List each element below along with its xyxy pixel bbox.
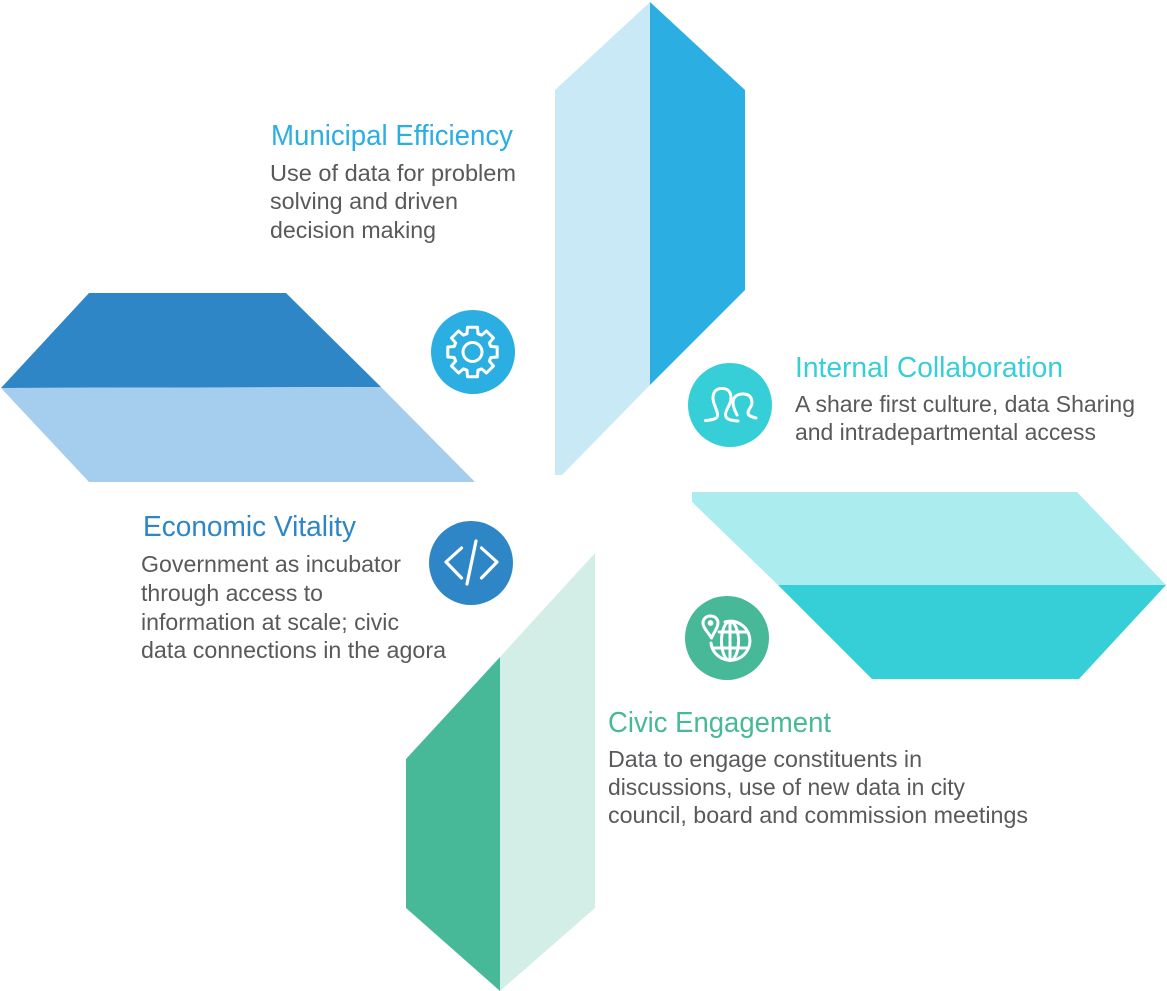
description: Civic Engagement: Data to engage constituents in [608, 746, 922, 772]
description: Internal Collaboration: A share first culture, data Sharing [795, 391, 1135, 417]
text block: Civic Engagement [608, 707, 1028, 828]
icon: globe with location pin [685, 596, 769, 680]
description: Economic Vitality: through access to [141, 580, 323, 606]
description: Economic Vitality: data connections in the agora [141, 637, 447, 663]
description: Economic Vitality: information at scale; civic [141, 609, 399, 635]
description: Internal Collaboration: and intradepartmental access [795, 419, 1096, 445]
description: Municipal Efficiency: Use of data for problem [270, 160, 516, 186]
text block: Internal Collaboration [795, 352, 1135, 445]
description: Internal Collaboration [795, 391, 1135, 445]
icon: gear [431, 310, 515, 394]
description: Economic Vitality [141, 551, 447, 663]
description: Economic Vitality: Government as incubator [141, 551, 401, 577]
text block: Municipal Efficiency [270, 120, 516, 243]
description: Civic Engagement [608, 746, 1028, 828]
heading: Economic Vitality: Economic Vitality [143, 511, 357, 543]
heading: Municipal Efficiency: Municipal Efficiency [271, 120, 514, 152]
shape: bottom green blade [406, 553, 595, 991]
description: Civic Engagement: council, board and commission meetings [608, 802, 1028, 828]
description: Municipal Efficiency [270, 160, 516, 243]
text block: Economic Vitality [141, 511, 447, 663]
heading: Internal Collaboration: Internal Collaboration [795, 352, 1063, 384]
heading: Civic Engagement: Civic Engagement [608, 707, 831, 739]
icon: code brackets [429, 521, 513, 605]
icon: people [688, 363, 772, 447]
shape: right teal blade [692, 492, 1166, 679]
shape: top blue blade [555, 2, 745, 475]
description: Municipal Efficiency: decision making [270, 217, 436, 243]
shape: left dark blue blade [1, 293, 475, 482]
description: Civic Engagement: discussions, use of new data in city [608, 774, 965, 800]
description: Municipal Efficiency: solving and driven [270, 188, 458, 214]
